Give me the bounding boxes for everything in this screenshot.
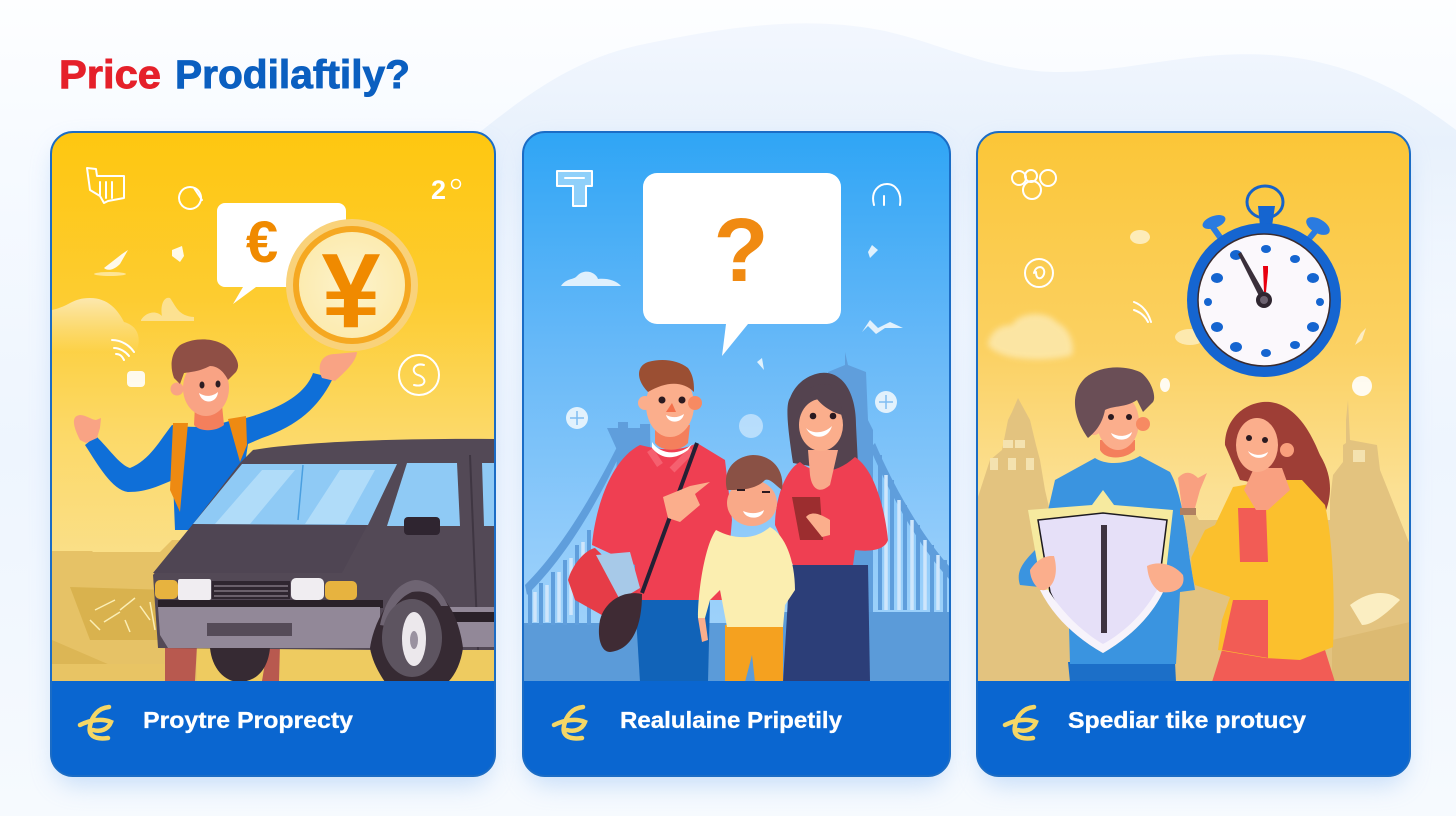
- hood: [153, 524, 193, 573]
- town silhouette: [977, 398, 1410, 682]
- title: Price: [59, 53, 161, 97]
- footer bar: [977, 681, 1410, 776]
- yen coin: [286, 219, 418, 351]
- hands: [1030, 556, 1056, 590]
- hair: [172, 339, 238, 384]
- front wheel: [210, 648, 270, 682]
- panel: card 3 stopwatch and shield: [977, 132, 1410, 785]
- child: [698, 455, 795, 682]
- shield: [1028, 490, 1173, 653]
- card border: [977, 132, 1410, 776]
- footer icon: [1005, 707, 1036, 738]
- person with coin: [74, 339, 357, 681]
- title: [59, 53, 410, 97]
- speech bubble: [643, 173, 841, 356]
- stopwatch: [1187, 186, 1341, 377]
- footer icon: [80, 707, 111, 738]
- distant town: [52, 540, 197, 664]
- man with shield: [1019, 367, 1195, 682]
- footer label: Proytre Proprecty: [143, 707, 353, 733]
- bridge silhouette: [523, 352, 950, 682]
- van: [153, 439, 496, 682]
- footer label: Spediar tike protucy: [1068, 707, 1306, 733]
- man with bag: [568, 360, 732, 682]
- card border: [523, 132, 950, 776]
- yen coin: ¥: [322, 232, 381, 350]
- neck and face: [194, 405, 224, 430]
- panel: card 1 car and coin: [51, 132, 496, 785]
- mirror: [404, 517, 440, 535]
- hands: [74, 415, 101, 443]
- rear wheel: [370, 586, 463, 682]
- legs: [165, 645, 280, 681]
- card border: [51, 132, 495, 776]
- decorative icons: [87, 168, 460, 395]
- clouds: [988, 314, 1073, 359]
- woman: [1178, 402, 1335, 682]
- panel: card 2 family with question: [523, 132, 950, 785]
- footer bar: [51, 681, 495, 776]
- side windows: [387, 463, 460, 526]
- headlights and grille: [158, 600, 383, 608]
- speech bubble: [217, 203, 346, 304]
- torso and arms: [85, 373, 333, 530]
- door line: [470, 455, 478, 650]
- footer bar: [523, 681, 950, 776]
- woman: [775, 373, 888, 682]
- windshield: [193, 464, 397, 525]
- footer label: Realulaine Pripetily: [620, 707, 842, 733]
- small icons: [566, 245, 903, 438]
- decorative icons: [1012, 170, 1151, 322]
- question mark: ?: [714, 201, 768, 301]
- bumper: [158, 607, 380, 648]
- clouds: [52, 298, 194, 352]
- cloud: [561, 272, 621, 286]
- footer icon: [554, 707, 585, 738]
- background hill shape: [470, 23, 1456, 320]
- backpack straps: [170, 416, 247, 512]
- euro sign: €: [246, 210, 278, 275]
- title: Prodilaftily?: [175, 53, 410, 97]
- number mark: 2: [431, 175, 446, 205]
- raised hand: [1178, 473, 1207, 508]
